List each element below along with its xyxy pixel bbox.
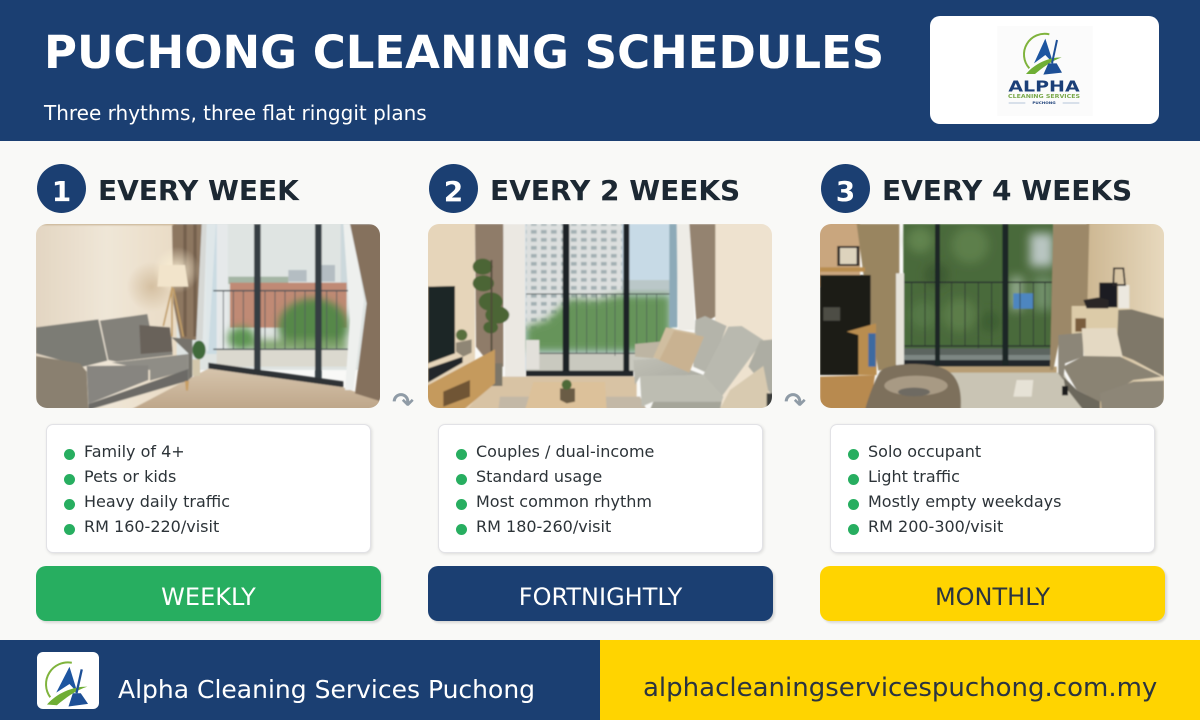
bullet: weekly price: RM 160-220/visit: [84, 517, 219, 536]
step 1 number: 1: [52, 175, 71, 208]
photo 3: living room with dog bed: [820, 224, 1164, 408]
logo card: PUCHONG: [1032, 101, 1056, 105]
step 2 number: [429, 164, 478, 213]
bullet: standard usage: Standard usage: [476, 467, 602, 486]
step 1 number: [37, 164, 86, 213]
panel: who monthly suits: [830, 424, 1155, 553]
plan button: weekly: [36, 566, 381, 621]
arrow 2 to 3: ↷: [784, 388, 806, 418]
footer logo: [37, 652, 99, 709]
footer website: alphacleaningservicespuchong.com.my: [643, 673, 1157, 703]
step 3 number: [821, 164, 870, 213]
plan button: fortnightly: FORTNIGHTLY: [519, 583, 682, 611]
step 3 heading: EVERY 4 WEEKS: [882, 174, 1132, 207]
step 2 number: 2: [444, 175, 463, 208]
panel: who fortnightly suits: [438, 424, 763, 553]
bullet: monthly price: RM 200-300/visit: [868, 517, 1003, 536]
plan button: monthly: [820, 566, 1165, 621]
arrow 1 to 2: ↷: [392, 388, 414, 418]
step 2 heading: EVERY 2 WEEKS: [490, 174, 740, 207]
panel: who weekly suits: [46, 424, 371, 553]
bullet: family of 4+: Family of 4+: [84, 442, 185, 461]
step 1 heading: EVERY WEEK: [98, 174, 299, 207]
footer band: website: [600, 640, 1200, 720]
logo card: [930, 16, 1159, 124]
bullet: heavy traffic: Heavy daily traffic: [84, 492, 230, 511]
plan button: fortnightly: [428, 566, 773, 621]
bullet: empty weekdays: Mostly empty weekdays: [868, 492, 1061, 511]
bullet: fortnightly price: RM 180-260/visit: [476, 517, 611, 536]
plan button: monthly: MONTHLY: [935, 583, 1050, 611]
plan button: weekly: WEEKLY: [161, 583, 256, 611]
header band: [0, 0, 1200, 141]
logo card: ALPHA: [1008, 77, 1080, 95]
bullet: pets or kids: Pets or kids: [84, 467, 176, 486]
bullet: solo occupant: Solo occupant: [868, 442, 981, 461]
footer band: brand: [0, 640, 600, 720]
bullet: light traffic: Light traffic: [868, 467, 960, 486]
bullet: most common: Most common rhythm: [476, 492, 652, 511]
bullet: couples: Couples / dual-income: [476, 442, 654, 461]
subtitle: Three rhythms, three flat ringgit plans: [44, 101, 427, 125]
step 3 number: 3: [836, 175, 855, 208]
title: PUCHONG CLEANING SCHEDULES: [44, 26, 884, 79]
footer brand name: Alpha Cleaning Services Puchong: [118, 675, 535, 704]
photo 2: living room with beige sofa: [428, 224, 772, 408]
photo 1: living room with grey sofa: [36, 224, 380, 408]
logo card: CLEANING SERVICES: [1008, 94, 1080, 100]
